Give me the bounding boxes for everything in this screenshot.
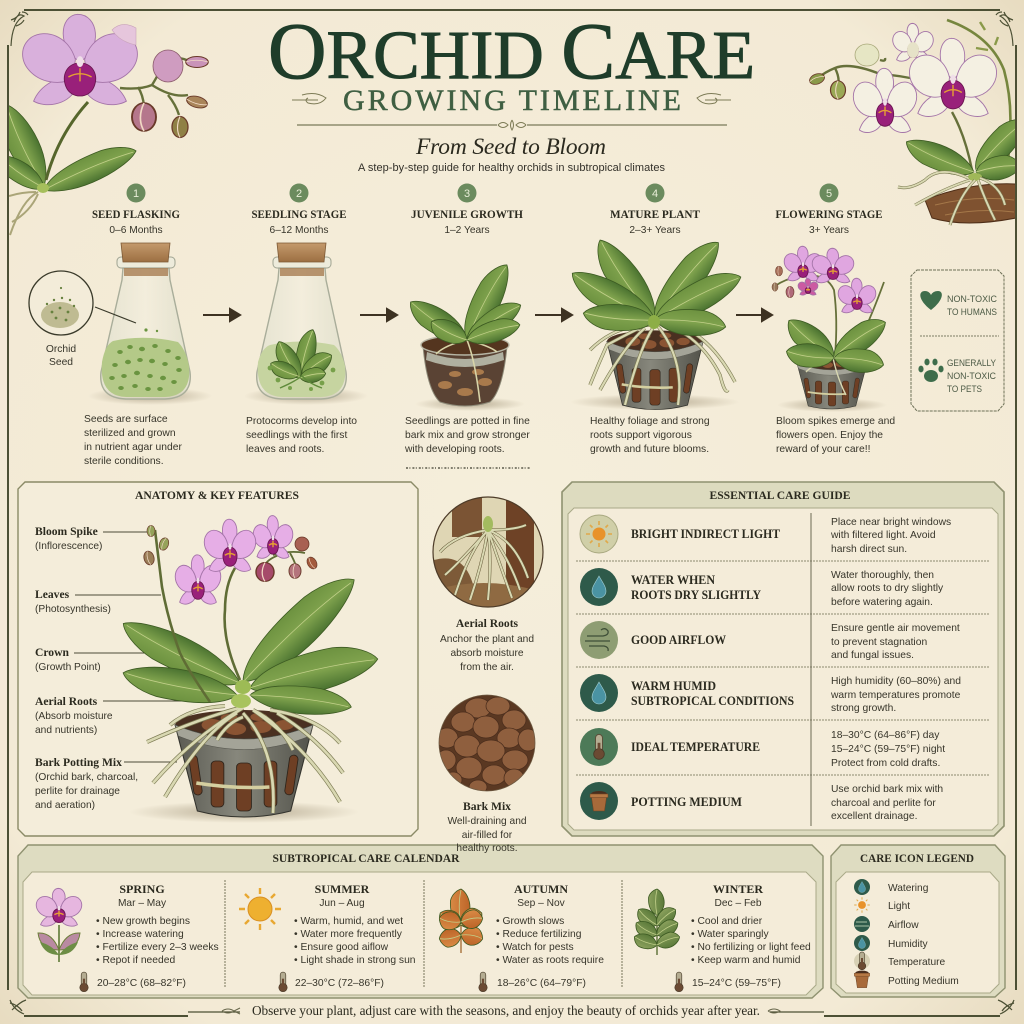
panel: subtropical care calendar: SUBTROPICAL CARE CALENDAR — [272, 851, 460, 865]
care row: ideal temperature — [580, 728, 945, 769]
season: autumn: • Reduce fertilizing — [496, 929, 582, 940]
icon: winter sprig — [632, 889, 682, 955]
step 2: seedling stage: seedlings with the first — [246, 430, 347, 441]
care row: bright indirect light: Place near bright windows — [831, 517, 951, 528]
step 5: flowering stage: 5 — [826, 188, 832, 200]
care row: warm humid conditions: WARM HUMID — [631, 679, 716, 693]
panel: toxicity note: TO HUMANS — [947, 306, 997, 317]
step 3: juvenile growth: 3 — [464, 188, 470, 200]
season: summer: SUMMER — [315, 882, 370, 896]
care row: potting medium: POTTING MEDIUM — [631, 795, 742, 809]
step 4: mature plant: MATURE PLANT — [610, 207, 700, 221]
anatomy labels: Aerial Roots — [35, 695, 98, 708]
step 4: mature plant: 2–3+ Years — [629, 225, 681, 236]
care row: potting medium: charcoal and perlite for — [831, 798, 936, 809]
step 1: seed flasking: Orchid — [46, 344, 76, 355]
step 1: seed flasking — [29, 184, 212, 467]
care row: good airflow: and fungal issues. — [831, 650, 914, 661]
step 2: seedling stage: 6–12 Months — [270, 225, 328, 236]
care row: ideal temperature: 15–24°C (59–75°F) night — [831, 744, 945, 755]
care row: water when roots dry: before watering again. — [831, 597, 933, 608]
panel: aerial roots feature: from the air. — [460, 662, 514, 673]
season: summer: Jun – Aug — [319, 898, 365, 909]
season: winter: WINTER — [713, 882, 763, 896]
season: autumn — [435, 882, 604, 992]
legend: temperature: Temperature — [888, 957, 946, 968]
icon: flowering orchid in pot — [772, 246, 892, 412]
care row: ideal temperature: IDEAL TEMPERATURE — [631, 740, 760, 754]
step 4: mature plant: growth and future blooms. — [590, 444, 709, 455]
anatomy labels: (Photosynthesis) — [35, 604, 111, 615]
step 4: mature plant: Healthy foliage and strong — [590, 416, 710, 427]
arrow 1 — [203, 309, 240, 321]
step 3: juvenile growth: with developing roots. — [404, 444, 505, 455]
panel: aerial roots feature: Aerial Roots — [456, 617, 519, 630]
anatomy labels: (Inflorescence) — [35, 541, 102, 552]
panel: aerial roots feature — [432, 497, 544, 673]
image circle: bark chips — [436, 695, 538, 795]
title: ORCHID CARE — [268, 8, 755, 96]
panel: anatomy and key features — [18, 482, 418, 836]
arrow 2 — [360, 309, 397, 321]
care row: water when roots dry: WATER WHEN — [631, 573, 715, 587]
care row: good airflow: Ensure gentle air movement — [831, 623, 960, 634]
anatomy labels: and nutrients) — [35, 725, 97, 736]
season: summer: • Warm, humid, and wet — [294, 916, 403, 927]
intro sentence: A step-by-step guide for healthy orchids in subtropical climates — [358, 162, 666, 174]
icon: orchid seed magnifier — [29, 271, 136, 335]
panel: subtropical care calendar — [18, 845, 823, 998]
anatomy labels: (Orchid bark, charcoal, — [35, 772, 138, 783]
panel: aerial roots feature: Anchor the plant and — [440, 634, 534, 645]
legend: potting medium — [854, 971, 959, 988]
step 5: flowering stage: flowers open. Enjoy the — [776, 430, 883, 441]
panel: care icon legend — [831, 845, 1005, 997]
panel: bark mix feature: Bark Mix — [463, 800, 511, 813]
icon: seedling flask — [244, 243, 368, 405]
panel: toxicity note: NON-TOXIC — [947, 293, 997, 304]
season: summer — [239, 882, 416, 992]
season: summer: • Water more frequently — [294, 929, 403, 940]
icon: seed flask — [88, 243, 212, 405]
care row: bright indirect light: with filtered light. Avoid — [830, 530, 936, 541]
arrow 4 — [736, 309, 772, 321]
legend: humidity: Humidity — [888, 939, 929, 950]
season: autumn: AUTUMN — [514, 882, 568, 896]
care row: warm humid conditions: High humidity (60–80%) and — [831, 676, 961, 687]
season: winter: 15–24°C (59–75°F) — [692, 978, 781, 989]
panel: care icon legend: CARE ICON LEGEND — [860, 851, 974, 865]
care row: bright indirect light: BRIGHT INDIRECT LIGHT — [631, 527, 780, 541]
step 5: flowering stage: Bloom spikes emerge and — [776, 416, 895, 427]
care row: warm humid conditions: warm temperatures promote — [830, 690, 961, 701]
care row: bright indirect light — [580, 515, 951, 555]
season: winter: • Keep warm and humid — [691, 955, 801, 966]
step 2: seedling stage: 2 — [296, 188, 302, 200]
anatomy labels: perlite for drainage — [35, 786, 120, 797]
top-right white orchid illustration — [808, 20, 1024, 225]
legend: watering — [854, 879, 929, 895]
season: winter: Dec – Feb — [714, 898, 762, 909]
tagline: From Seed to Bloom — [415, 134, 606, 160]
season: autumn: 18–26°C (64–79°F) — [497, 978, 586, 989]
step 3: juvenile growth: bark mix and grow stronger — [405, 430, 530, 441]
step 1: seed flasking: SEED FLASKING — [92, 207, 180, 221]
panel: bark mix feature — [436, 695, 538, 854]
panel: toxicity note: GENERALLY — [947, 357, 997, 368]
subtitle: growing timeline: GROWING TIMELINE — [343, 84, 681, 117]
care row: good airflow: GOOD AIRFLOW — [631, 633, 726, 647]
step 5: flowering stage — [772, 184, 895, 455]
panel: toxicity note — [911, 270, 1004, 411]
step 3: juvenile growth: JUVENILE GROWTH — [411, 207, 524, 221]
care row: potting medium: excellent drainage. — [831, 811, 917, 822]
footer line: Observe your plant, adjust care with the seasons, and enjoy the beauty of orchids year after year. — [252, 1003, 760, 1018]
top-left pink orchid illustration — [0, 14, 209, 235]
season: spring: Mar – May — [118, 898, 167, 909]
panel: toxicity note: TO PETS — [947, 383, 982, 394]
panel: toxicity note: NON-TOXIC — [947, 370, 996, 381]
icon: summer sun — [239, 888, 281, 930]
panel: bark mix feature: healthy roots. — [456, 843, 518, 854]
panel: essential care guide: ESSENTIAL CARE GUIDE — [710, 488, 850, 502]
step 1: seed flasking: sterile conditions. — [84, 456, 164, 467]
care row: good airflow: to prevent stagnation — [831, 637, 927, 648]
anatomy labels: Crown — [35, 646, 69, 659]
step 4: mature plant: 4 — [652, 188, 658, 200]
care row: water when roots dry — [580, 568, 944, 608]
step 3: juvenile growth — [403, 184, 531, 468]
anatomy labels: Leaves — [35, 588, 70, 601]
season: summer: • Light shade in strong sun — [294, 955, 416, 966]
season: spring: • Increase watering — [96, 929, 184, 940]
step 2: seedling stage — [244, 184, 368, 455]
step 1: seed flasking: Seeds are surface — [84, 414, 168, 425]
step 5: flowering stage: 3+ Years — [809, 225, 849, 236]
season: autumn: • Watch for pests — [496, 942, 574, 953]
step 1: seed flasking: 1 — [133, 188, 139, 200]
care row: warm humid conditions — [580, 674, 961, 714]
care row: bright indirect light: harsh direct sun. — [831, 544, 907, 555]
season: spring — [36, 882, 219, 992]
season: summer: 22–30°C (72–86°F) — [295, 978, 384, 989]
care row: potting medium: Use orchid bark mix with — [831, 784, 943, 795]
season: winter: • No fertilizing or light feed — [691, 942, 811, 953]
legend: watering: Watering — [888, 883, 929, 894]
anatomy labels: (Absorb moisture — [35, 711, 113, 722]
step 2: seedling stage: Protocorms develop into — [246, 416, 357, 427]
legend: light — [854, 897, 910, 913]
legend: light: Light — [888, 901, 910, 912]
panel: aerial roots feature: absorb moisture — [450, 648, 524, 659]
panel: anatomy and key features: ANATOMY & KEY FEATURES — [135, 488, 299, 502]
care row: ideal temperature: Protect from cold drafts. — [831, 758, 940, 769]
legend: potting medium: Potting Medium — [888, 976, 959, 987]
season: spring: 20–28°C (68–82°F) — [97, 978, 186, 989]
season: summer: • Ensure good aiflow — [294, 942, 389, 953]
care row: good airflow — [580, 621, 960, 661]
icon: mature plant in basket pot — [565, 232, 747, 410]
season: spring: • Repot if needed — [96, 955, 175, 966]
season: spring: • New growth begins — [96, 916, 190, 927]
step 1: seed flasking: in nutrient agar under — [84, 442, 182, 453]
anatomy labels: and aeration) — [35, 800, 95, 811]
image circle: aerial roots — [432, 497, 544, 609]
title ornaments — [292, 94, 731, 130]
season: autumn: • Water as roots require — [496, 955, 604, 966]
anatomy labels: Bloom Spike — [35, 525, 98, 538]
icon: spring flower — [36, 888, 82, 962]
care row: water when roots dry: Water thoroughly, then — [831, 570, 934, 581]
icon: autumn leaf — [435, 889, 486, 953]
step 1: seed flasking: sterilized and grown — [84, 428, 176, 439]
legend: airflow: Airflow — [888, 920, 919, 931]
legend: temperature — [854, 952, 946, 970]
anatomy labels: Bark Potting Mix — [35, 756, 122, 769]
anatomy labels — [35, 525, 199, 811]
arrow 3 — [535, 309, 572, 321]
step 4: mature plant: roots support vigorous — [590, 430, 692, 441]
step 1: seed flasking: 0–6 Months — [109, 225, 163, 236]
care row: ideal temperature: 18–30°C (64–86°F) day — [831, 730, 940, 741]
panel: bark mix feature: Well-draining and — [447, 816, 527, 827]
anatomy labels: (Growth Point) — [35, 662, 101, 673]
step 3: juvenile growth: 1–2 Years — [444, 225, 490, 236]
step 2: seedling stage: SEEDLING STAGE — [252, 207, 346, 221]
step 3: juvenile growth: Seedlings are potted in fine — [405, 416, 530, 427]
step 1: seed flasking: Seed — [49, 357, 73, 368]
step 4: mature plant — [565, 184, 747, 455]
care row: potting medium — [580, 782, 943, 822]
step 5: flowering stage: reward of your care!! — [776, 444, 870, 455]
season: autumn: Sep – Nov — [517, 898, 566, 909]
care row: water when roots dry: ROOTS DRY SLIGHTLY — [631, 588, 761, 602]
icon: heart — [920, 291, 942, 310]
icon: juvenile plant in clear pot — [403, 258, 526, 411]
panel: bark mix feature: air-filled for — [462, 830, 513, 841]
step 5: flowering stage: FLOWERING STAGE — [776, 207, 882, 221]
season: winter: • Water sparingly — [691, 929, 769, 940]
step 2: seedling stage: leaves and roots. — [246, 444, 324, 455]
illustration: anatomy orchid plant — [115, 516, 382, 823]
season: winter — [632, 882, 811, 992]
care row: warm humid conditions: SUBTROPICAL CONDITIONS — [631, 694, 794, 708]
care row: water when roots dry: allow roots to dry slightly — [831, 583, 944, 594]
legend: airflow — [854, 916, 919, 932]
season: spring: • Fertilize every 2–3 weeks — [96, 942, 219, 953]
panel: essential care guide — [562, 482, 1004, 836]
icon: paw — [918, 359, 944, 382]
legend: humidity — [854, 935, 929, 951]
care row: warm humid conditions: strong growth. — [831, 703, 896, 714]
season: autumn: • Growth slows — [496, 916, 564, 927]
season: spring: SPRING — [119, 882, 165, 896]
season: winter: • Cool and drier — [691, 916, 763, 927]
